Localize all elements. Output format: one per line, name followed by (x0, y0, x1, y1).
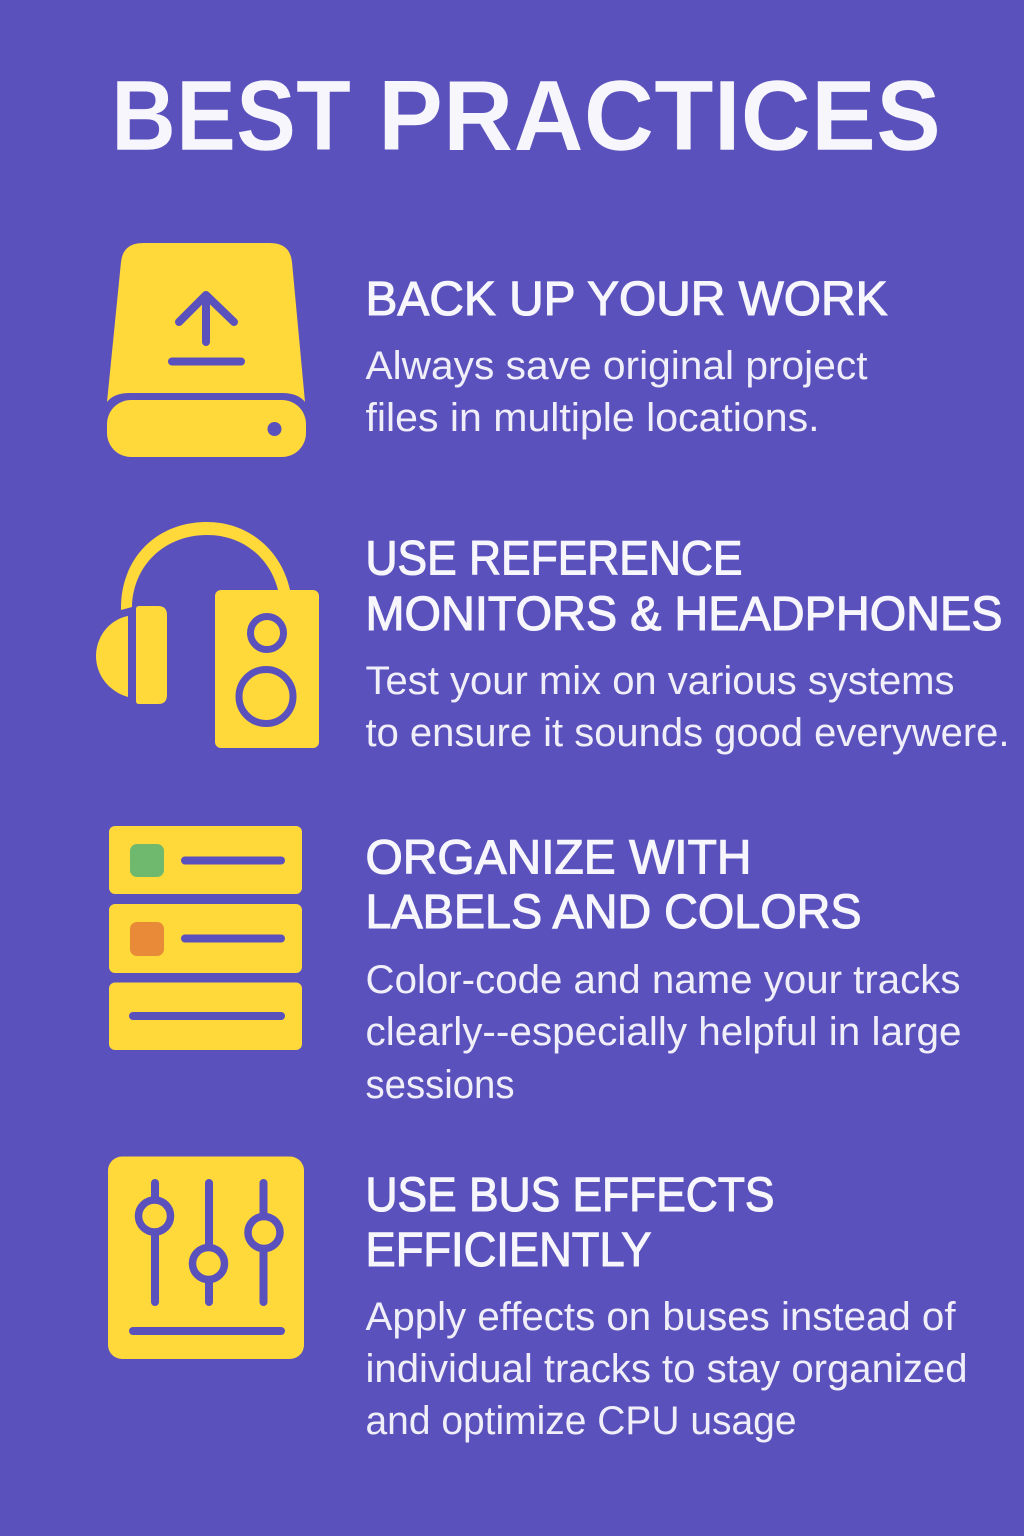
text block: Always save original project (366, 344, 868, 388)
heading: BACK UP YOUR WORK (366, 272, 888, 326)
text block (366, 958, 962, 1107)
text block: Apply effects on buses instead of (366, 1295, 956, 1339)
heading: EFFICIENTLY (366, 1223, 652, 1277)
heading: ORGANIZE WITH (366, 830, 752, 884)
text block: Color-code and name your tracks (366, 958, 960, 1002)
title: BEST (111, 60, 351, 172)
title (111, 60, 941, 172)
text block (366, 344, 868, 440)
icon: track list (109, 826, 302, 1050)
text block: and optimize CPU usage (366, 1399, 796, 1443)
icon: hard drive with upload arrow (107, 243, 306, 457)
text block: individual tracks to stay organized (366, 1347, 968, 1391)
text block (366, 1295, 968, 1443)
text block: to ensure it sounds good everywere. (366, 711, 1010, 755)
heading: USE REFERENCE (366, 532, 742, 586)
text block: clearly--especially helpful in large (366, 1010, 962, 1054)
text block (366, 659, 1010, 755)
heading: USE BUS EFFECTS (366, 1168, 774, 1222)
text block: sessions (366, 1063, 514, 1107)
panel: use bus effects efficiently (108, 1156, 968, 1443)
icon: mixer sliders (108, 1156, 304, 1359)
panel: reference monitors and headphones (96, 522, 1010, 755)
heading: MONITORS & HEADPHONES (366, 587, 1002, 641)
text block: files in multiple locations. (366, 396, 820, 440)
icon: headphones and speaker (96, 522, 319, 748)
text block: Test your mix on various systems (366, 659, 954, 703)
panel: back up your work (107, 243, 888, 457)
heading (366, 532, 1002, 641)
panel: organize with labels and colors (109, 826, 962, 1107)
heading (366, 1168, 774, 1277)
heading (366, 830, 862, 939)
title: PRACTICES (378, 60, 941, 172)
heading: LABELS AND COLORS (366, 885, 862, 939)
